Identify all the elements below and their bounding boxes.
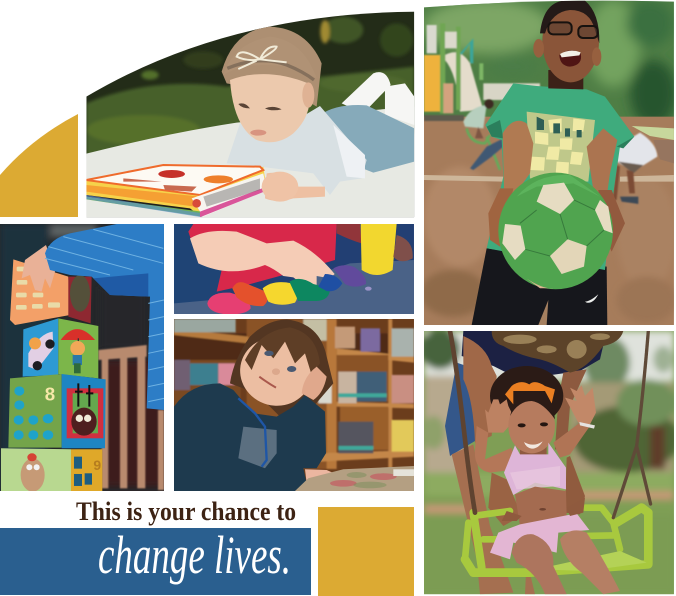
messy hair back	[230, 319, 333, 417]
blue striped sleeve	[45, 224, 164, 410]
arm and hand	[190, 231, 335, 287]
eyes, nose, mouth	[264, 351, 274, 356]
arm and hand	[265, 173, 325, 201]
photo: baby reading a book on a blanket	[86, 10, 414, 218]
third block	[8, 374, 106, 448]
hoodie	[174, 383, 326, 491]
pink top	[504, 443, 566, 495]
banner: change lives: change lives.	[98, 525, 291, 585]
wooden beam	[424, 175, 674, 182]
shirt print	[238, 427, 277, 468]
swing seat	[465, 508, 648, 573]
table	[174, 260, 414, 314]
toddler hair	[490, 366, 564, 416]
soccer ball	[498, 173, 613, 289]
chessboard print	[527, 112, 595, 182]
belly	[515, 487, 567, 526]
red shirt	[188, 224, 337, 292]
top block	[10, 259, 92, 325]
legs	[512, 534, 567, 594]
nike swoosh	[585, 294, 598, 303]
hand on table	[305, 469, 345, 483]
yellow cups	[361, 224, 397, 275]
photo: stacking toy blocks	[0, 224, 164, 492]
skirt	[490, 513, 589, 559]
toddler neck and head	[520, 447, 547, 454]
shirt	[227, 106, 367, 195]
fringe	[245, 327, 320, 375]
heading: this is your chance to: This is your chance to	[76, 497, 296, 526]
photo: laughing boy holding green soccer ball	[420, 0, 676, 327]
white tights	[342, 72, 414, 125]
second block	[23, 318, 98, 378]
neck and head	[548, 70, 583, 89]
woman's hands	[488, 473, 522, 526]
fingers	[262, 172, 298, 202]
hand at head	[302, 367, 327, 400]
book	[86, 167, 267, 216]
playground equipment	[424, 23, 540, 121]
toddler arms	[475, 426, 517, 473]
face	[232, 329, 320, 414]
bottom block	[1, 448, 102, 492]
photo: child playing with coloured modelling clay	[174, 224, 414, 314]
woman's fingers on waist	[502, 498, 585, 521]
arms	[503, 121, 533, 197]
books	[174, 319, 236, 332]
hair bow	[237, 46, 287, 69]
third block: 8	[45, 384, 55, 405]
photo: smiling boy at library table	[174, 319, 414, 491]
crib rails	[98, 345, 164, 490]
jeans	[320, 105, 414, 173]
ground	[424, 117, 674, 327]
modelling clay	[207, 265, 372, 314]
gold quarter-curve shape	[0, 114, 78, 217]
curly hair	[492, 331, 623, 373]
banner: change lives	[0, 525, 311, 595]
woman: shorts, top, arms	[445, 363, 477, 456]
blanket	[86, 107, 414, 217]
head and hair	[222, 27, 322, 107]
swing chains	[450, 331, 651, 518]
glasses	[548, 22, 598, 38]
hands	[488, 188, 513, 247]
child's hand	[22, 245, 55, 292]
open mouth	[559, 50, 581, 67]
background children	[463, 99, 657, 204]
gold square	[318, 507, 414, 596]
eyes, mouth	[238, 103, 282, 110]
bookshelves	[174, 319, 414, 469]
orange hair bow	[505, 382, 555, 404]
bottom block: 9	[93, 457, 101, 473]
blurred background	[420, 329, 676, 594]
photo: toddler waving on a green swing	[420, 329, 676, 594]
puzzle table	[295, 466, 414, 491]
eyes and smile	[518, 423, 526, 427]
t-shirt	[485, 83, 634, 270]
waving hands	[485, 399, 515, 433]
shorts	[472, 248, 607, 325]
